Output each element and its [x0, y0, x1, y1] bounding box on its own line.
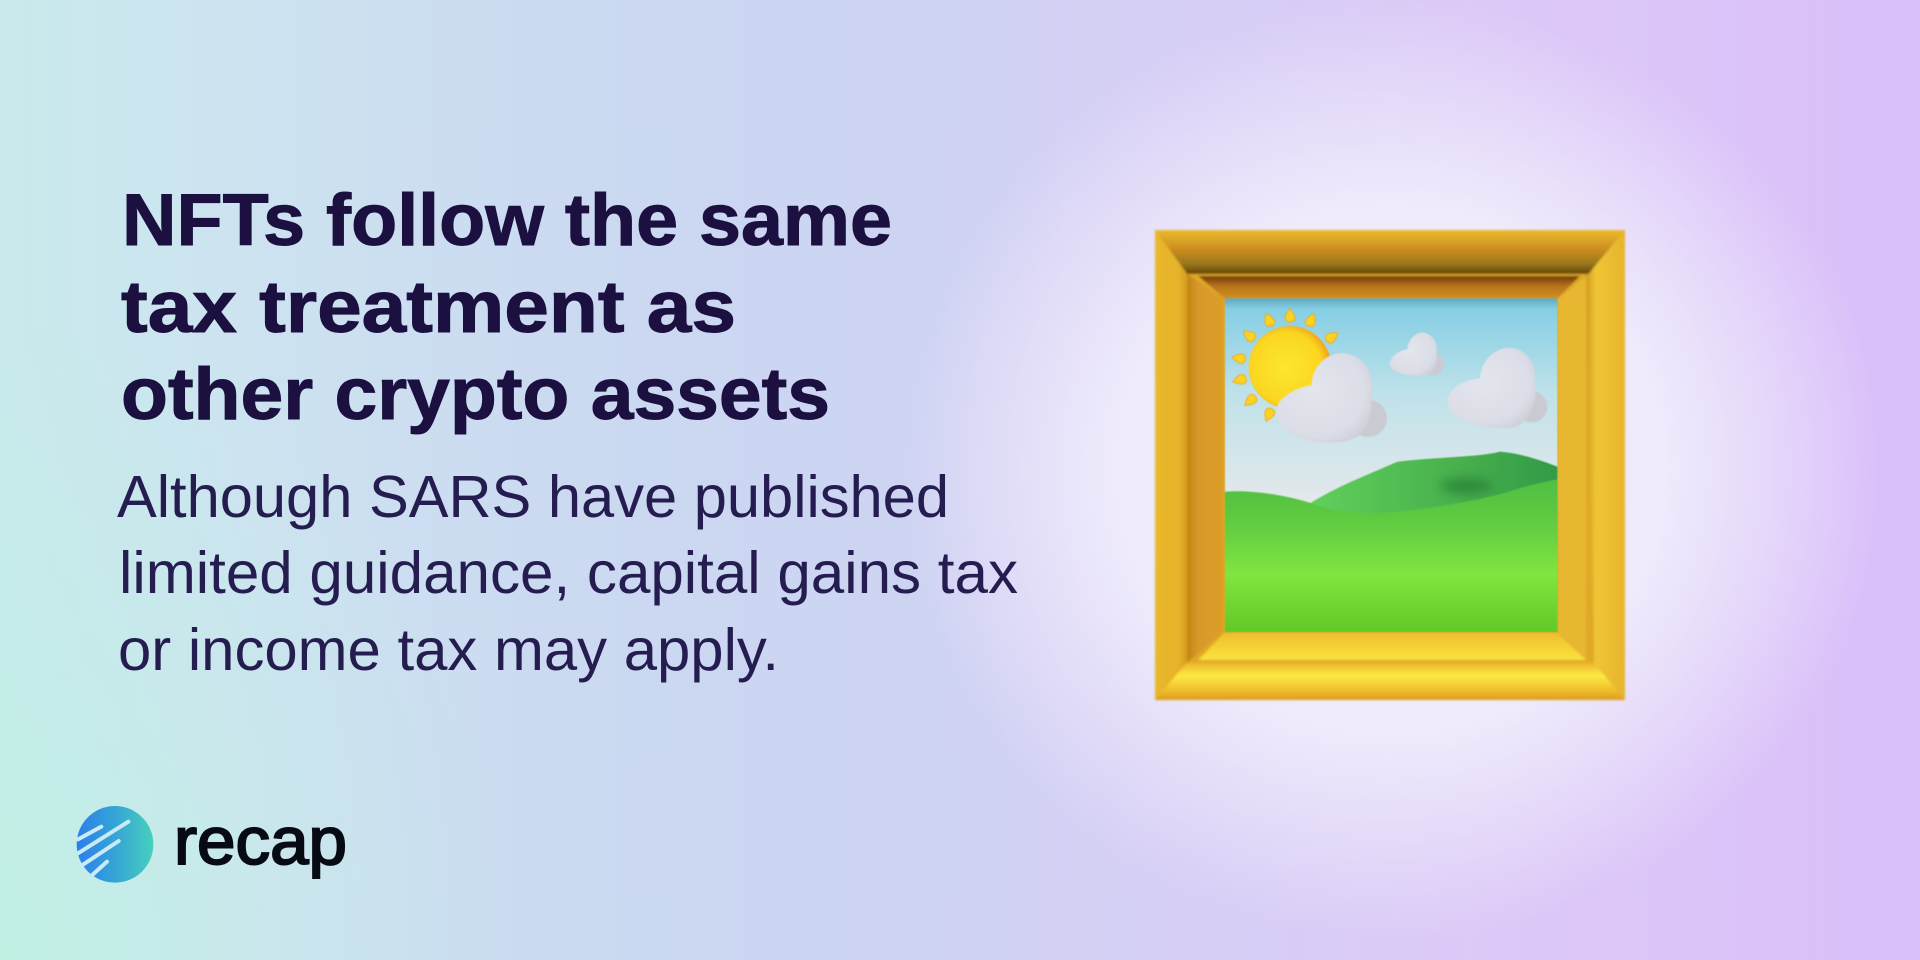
frame: inner right [1558, 277, 1586, 660]
title: NFTs follow the same [122, 180, 892, 261]
picture: sun [1249, 326, 1331, 409]
frame: left moulding [1155, 230, 1187, 700]
frame: inner left [1187, 274, 1223, 663]
frame: top moulding [1155, 230, 1625, 274]
icon: framed picture [1155, 230, 1625, 700]
logo: recap [77, 804, 347, 883]
logo wordmark: recap [174, 804, 347, 879]
picture: hill shadow [1440, 478, 1493, 494]
picture: small cloud [1390, 333, 1444, 376]
frame: right moulding [1586, 230, 1625, 700]
title: tax treatment as [121, 267, 736, 348]
picture: back hill [1310, 452, 1557, 543]
title [121, 180, 892, 435]
body text: Although SARS have published [117, 464, 949, 530]
picture: meadow [1225, 479, 1557, 632]
body text: limited guidance, capital gains tax [119, 540, 1018, 606]
frame: bottom moulding [1155, 663, 1625, 700]
frame: inner top [1198, 276, 1580, 299]
logo mark [77, 806, 153, 883]
title: other crypto assets [121, 354, 830, 435]
body text [117, 464, 1018, 683]
frame: outer body [1155, 230, 1625, 700]
picture: large cloud [1276, 353, 1387, 443]
body text: or income tax may apply. [118, 617, 779, 683]
picture: sun rays [1231, 308, 1341, 423]
frame: inner bottom [1198, 633, 1586, 660]
picture: right cloud [1448, 348, 1547, 428]
picture: sky [1225, 298, 1557, 512]
